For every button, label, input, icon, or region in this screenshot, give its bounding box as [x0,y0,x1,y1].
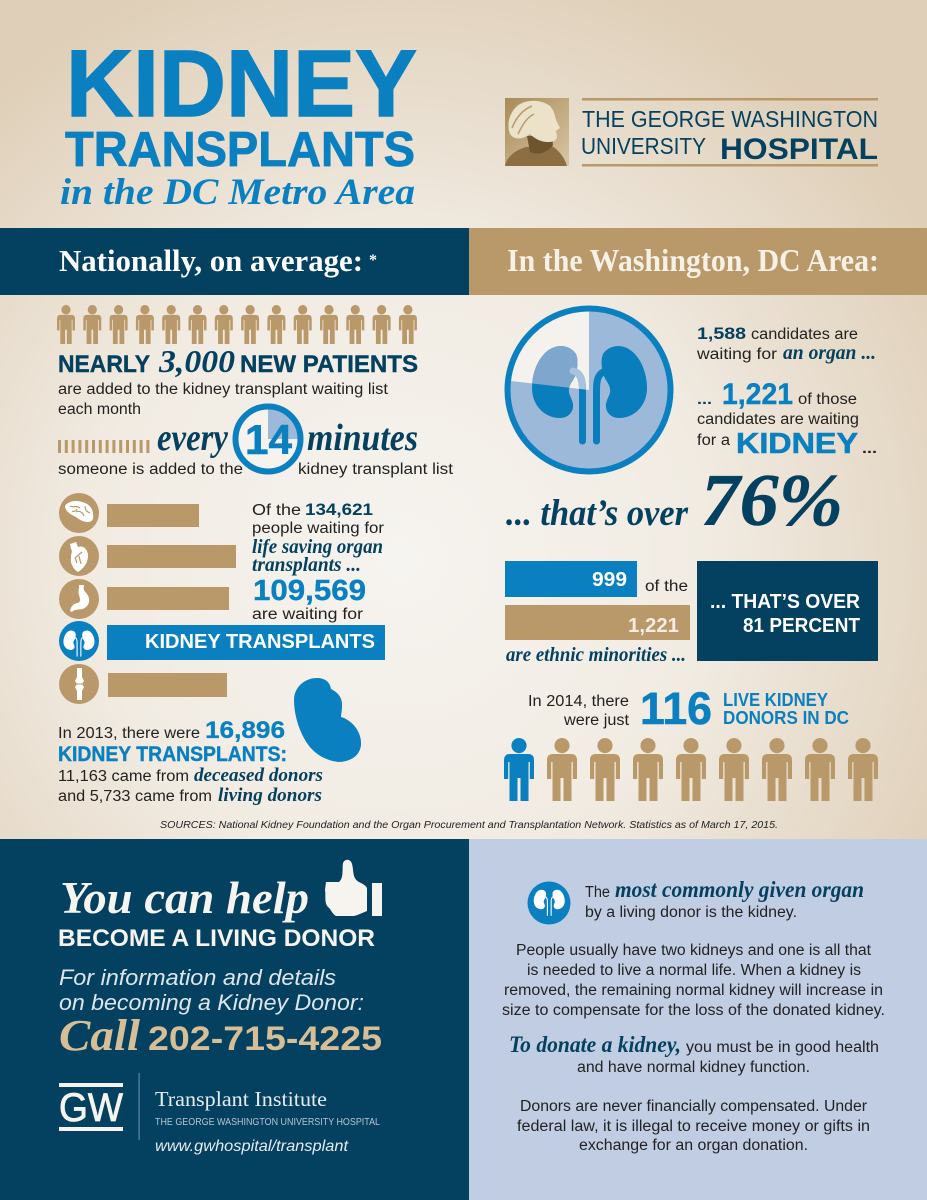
panel: organ bar chart [59,493,385,704]
heading: nearly 3,000 new patients: NEW PATIENTS [240,351,418,378]
text block: people waiting: 134,621 [305,500,373,519]
text: someone is added: someone is added to the [58,461,243,478]
bar: heart [107,545,236,568]
text: added each month: each month [58,401,141,418]
text: 116 live kidney donors: In 2014, there [528,693,629,710]
text: transplant institute: Transplant Institute [155,1087,327,1111]
bar: kidney transplants: KIDNEY TRANSPLANTS [145,631,375,653]
text: most commonly given organ: The [585,884,610,901]
text: waiting for a kidney: for a [697,432,730,449]
heading: nearly 3,000 new patients: 3,000 [158,343,235,379]
callout: over 81 percent [697,561,878,661]
text: transplant institute: THE GEORGE WASHINGTON UNIVERSITY HOSPITAL [155,1117,380,1128]
text: candidates waiting for an organ: waiting for [696,346,777,363]
icon: 14 minute clock [236,406,300,472]
icon row: 9 donors [504,738,878,801]
logo: George Washington University Hospital: HOSPITAL [720,133,878,166]
text: 116 live kidney donors [528,683,849,734]
text block: two kidneys: is needed to live a normal life. When a kidney is [527,962,861,979]
icon row: 14 people [57,305,417,344]
icon: kidney shape [294,678,361,762]
text: candidates waiting for an organ: 1,588 [697,324,746,343]
text: someone is added [58,461,454,478]
bar chart: ethnic minorities: 1,221 [628,615,679,637]
text block: compensation: exchange for an organ donation. [579,1137,808,1154]
bar: brain [107,504,199,527]
chart: 76 percent pie with kidneys [508,308,670,472]
text: someone is added: kidney transplant list [298,461,454,478]
text: waiting for a kidney: 1,221 [722,378,793,411]
text: most commonly given organ [585,877,864,921]
text block: people waiting: are waiting for [252,606,363,623]
text block: 2013 transplants: deceased donors [194,765,323,786]
text block: people waiting: transplants ... [252,554,361,576]
text: minutes: minutes [307,417,418,459]
text block: people waiting: 109,569 [253,575,366,607]
icon: 14 minute clock: 14 [245,416,293,463]
sources: SOURCES: National Kidney Foundation and the Organ Procurement and Transplantation Network. Statistics as of March 17, 2015. [160,820,778,831]
bar: stomach [107,587,229,610]
text: candidates waiting for an organ: an organ ... [783,342,876,364]
text: most commonly given organ: by a living donor is the kidney. [585,904,797,921]
text: 116 live kidney donors: LIVE KIDNEY [723,690,828,710]
text: that's over 76%: ... that’s over [506,493,689,534]
text: most commonly given organ: most commonly given organ [615,877,864,902]
title: KIDNEY [66,31,417,137]
bar chart: ethnic minorities: of the [645,578,688,595]
text: 116 live kidney donors: DONORS IN DC [723,708,849,728]
panel: national waiting list stats [57,305,454,478]
text: that's over 76%: 76% [701,460,843,542]
icon: Washington bust [505,98,569,166]
text: added each month [58,381,389,418]
logo: George Washington University Hospital [505,98,878,166]
bar chart: ethnic minorities [505,561,690,666]
panel: living donor facts [469,839,927,1200]
text: candidates waiting for an organ: candidates are [751,326,858,343]
text block: 2013 transplants [58,717,323,806]
text block: two kidneys [502,942,885,1019]
text block: compensation: federal law, it is illegal to receive money or gifts in [517,1118,870,1135]
logo: George Washington University Hospital: UNIVERSITY [581,133,706,159]
text: for information [59,965,364,1015]
text: 116 live kidney donors: were just [563,712,630,729]
panel: Washington DC stats [504,308,878,801]
heading: become a living donor: BECOME A LIVING DONOR [58,925,375,952]
text block: 2013 transplants: 16,896 [205,717,285,744]
text block: 2013 transplants: 11,163 came from [58,768,189,785]
title: in the DC Metro Area [60,172,415,213]
text block: two kidneys: size to compensate for the loss of the donated kidney. [502,1002,885,1019]
text block: people waiting: life saving organ [252,536,383,558]
text block: compensation [517,1098,870,1154]
text block: people waiting [252,500,384,623]
call to action: phone number [59,1011,382,1060]
text: candidates waiting for an organ [696,324,876,364]
text: for information: on becoming a Kidney Donor: [59,990,364,1015]
call to action: phone number: Call [59,1011,141,1060]
text: every: every [157,417,228,459]
callout: over 81 percent: 81 PERCENT [743,615,860,637]
text: waiting for a kidney: candidates are waiting [697,411,859,428]
text block: two kidneys: People usually have two kidneys and one is all that [516,942,872,959]
icon: stomach [59,579,99,619]
bar chart: ethnic minorities: are ethnic minorities ... [506,644,686,666]
text block: people waiting: people waiting for [252,520,384,537]
text: waiting for a kidney: of those [798,391,857,408]
text block: people waiting: Of the [252,502,301,519]
title: TRANSPLANTS [65,123,415,177]
banner: nationally: Nationally, on average: [59,243,363,278]
banner: Washington DC: In the Washington, DC Area: [507,242,879,278]
text block: two kidneys: removed, the remaining normal kidney will increase in [504,982,883,999]
text: waiting for a kidney: ... [697,391,712,408]
call to action: phone number: 202-715-4225 [148,1020,382,1058]
banner: Washington DC [469,228,927,295]
text block: 2013 transplants: living donors [218,785,322,806]
tick marks [58,440,151,453]
text: waiting for a kidney [697,378,877,460]
heading: nearly 3,000 new patients [58,343,418,379]
text: for information: For information and details [59,965,336,990]
text: waiting for a kidney: KIDNEY [736,428,858,460]
text block: compensation: Donors are never financially compensated. Under [520,1098,867,1115]
heading: you can help: You can help [60,873,309,923]
panel: you can help [0,839,469,1200]
text block: to donate [509,1032,879,1076]
logo: George Washington University Hospital: THE GEORGE WASHINGTON [582,106,878,132]
icon: kidney [59,621,99,661]
text block: 2013 transplants: and 5,733 came from [58,788,212,805]
bar chart: ethnic minorities: 999 [592,569,627,591]
bar: kidney transplants [107,625,385,660]
heading: nearly 3,000 new patients: NEARLY [58,351,150,378]
text: transplant institute: www.gwhospital/transplant [155,1138,349,1155]
icon: heart [59,536,99,576]
text: that's over 76% [506,460,843,542]
banner: nationally: * [369,252,377,269]
bar: joint [108,673,227,697]
text block: to donate: To donate a kidney, [509,1032,681,1057]
title [60,31,417,213]
text block: 2013 transplants: KIDNEY TRANSPLANTS: [58,743,287,766]
icon: knee joint [59,664,99,704]
icon: kidney [528,882,570,924]
text: waiting for a kidney: ... [862,440,877,457]
text block: to donate: and have normal kidney function. [577,1059,810,1076]
text block: 2013 transplants: In 2013, there were [58,725,200,742]
text block: to donate: you must be in good health [686,1039,879,1056]
banner: nationally [0,228,469,295]
logo: GW: GW [59,1086,123,1130]
icon: thumbs up [325,860,382,916]
text: 116 live kidney donors: 116 [640,683,712,734]
icon: brain [59,493,99,533]
text: added each month: are added to the kidney transplant waiting list [58,381,389,398]
callout: over 81 percent: ... THAT’S OVER [710,591,861,613]
text: transplant institute [155,1087,380,1155]
